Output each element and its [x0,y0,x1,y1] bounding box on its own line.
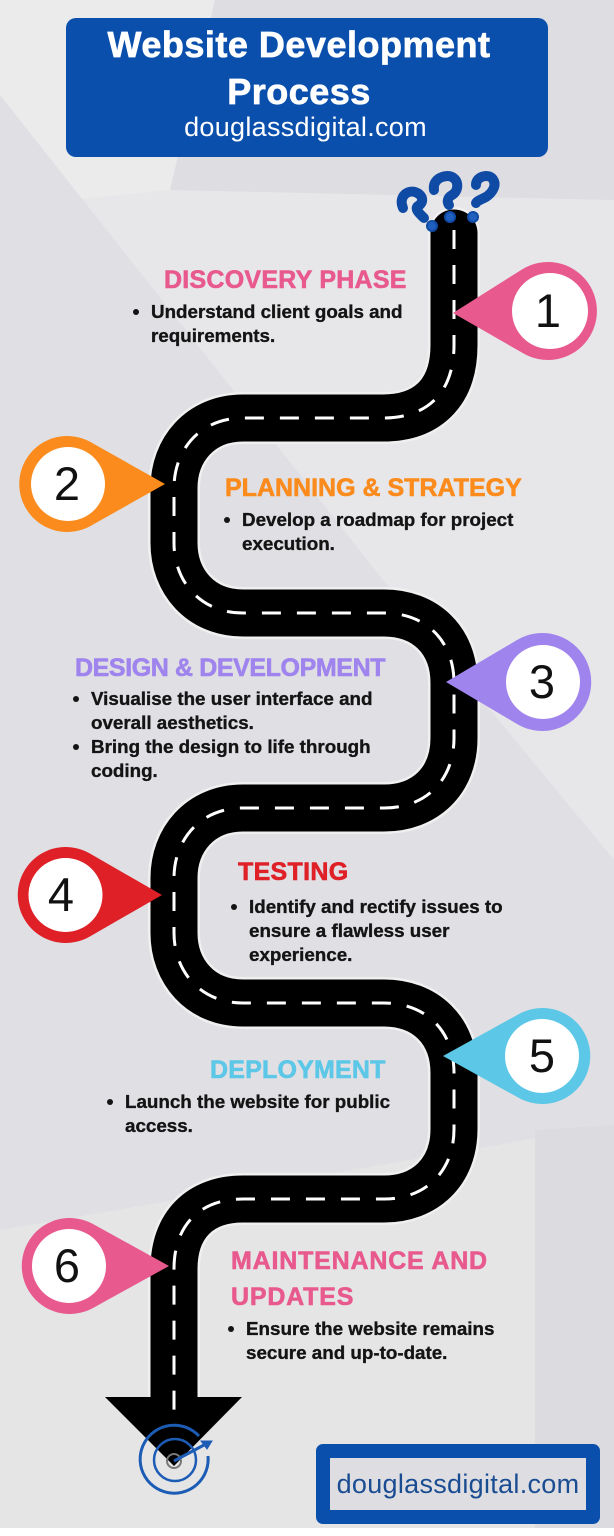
text: discovery phase: Understand client goals and [151,301,403,322]
marker 1: 1 [535,284,561,337]
text: planning and strategy: Develop a roadmap for project [242,509,513,530]
title: Process [227,71,371,112]
text: design and development: overall aesthetics. [91,712,254,733]
heading: discovery phase: DISCOVERY PHASE [164,266,407,294]
text: testing: Identify and rectify issues to [249,896,503,917]
text: maintenance and updates: secure and up-to-date. [246,1342,447,1363]
title banner [66,18,548,157]
text: testing: ensure a flawless user [249,920,449,941]
marker 1 [453,262,597,360]
text: testing [231,896,503,966]
title [107,24,490,112]
text: design and development [73,688,372,782]
heading: planning and strategy: PLANNING & STRATEGY [225,474,522,502]
text: deployment: Launch the website for public [125,1091,390,1112]
text: design and development: coding. [91,760,158,781]
text: planning and strategy [224,509,514,554]
website subtitle: douglassdigital.com [184,112,427,142]
text: maintenance and updates [228,1318,494,1364]
text: discovery phase [133,301,403,346]
heading: testing: TESTING [238,858,348,886]
footer website box: douglassdigital.com [337,1469,579,1499]
marker 6: 6 [54,1239,80,1292]
text: testing: experience. [249,944,352,965]
marker 4 [18,847,162,943]
marker 2 [19,436,165,532]
heading: deployment: DEPLOYMENT [210,1056,386,1084]
marker 3 [446,633,591,731]
marker 3: 3 [529,655,555,708]
footer website box [316,1444,600,1524]
text: design and development: Bring the design to life through [91,736,371,757]
title: Website Development [108,24,490,65]
marker 5: 5 [529,1029,555,1082]
marker 2: 2 [54,457,80,510]
marker 4: 4 [48,868,74,921]
heading: maintenance and updates [231,1247,488,1311]
heading: design and development: DESIGN & DEVELOPMENT [75,654,385,682]
marker 6 [22,1218,169,1314]
text: deployment: access. [125,1115,193,1136]
marker 5 [443,1008,590,1104]
text: maintenance and updates: Ensure the website remains [246,1318,494,1339]
text: planning and strategy: execution. [242,533,335,554]
heading: maintenance and updates: UPDATES [231,1283,354,1311]
text: deployment [107,1091,390,1136]
text: discovery phase: requirements. [151,325,275,346]
heading: maintenance and updates: MAINTENANCE AND [231,1247,488,1275]
text: design and development: Visualise the user interface and [91,688,372,709]
